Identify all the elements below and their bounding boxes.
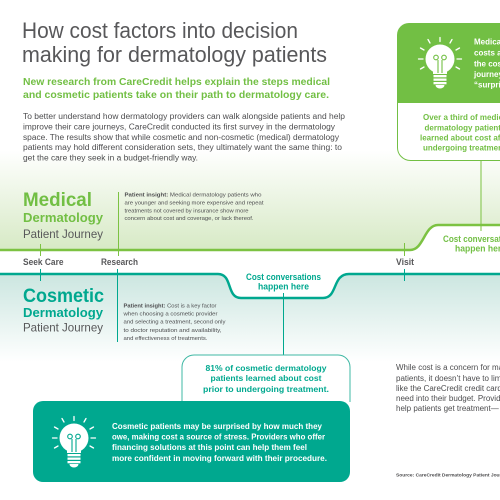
- medical heading: [23, 190, 104, 241]
- title: making for dermatology patients: [22, 42, 327, 67]
- icon: light bulb cosmetic: [52, 416, 96, 468]
- title: How cost factors into decision: [22, 18, 298, 43]
- medical patient insight: [124, 192, 264, 222]
- step labels: [23, 257, 414, 267]
- intro text: To better understand how dermatology providers can walk alongside patients and help: [23, 112, 346, 121]
- callout: cost conversations cosmetic: happen here: [258, 282, 309, 292]
- subheading: [23, 76, 330, 101]
- intro text: space. The results show that while cosmetic and non-cosmetic (medical) dermatology: [23, 133, 339, 142]
- visit tick teal: [404, 269, 405, 281]
- seek care tick green: [40, 244, 41, 256]
- subheading: and cosmetic patients take on their path to dermatology care.: [23, 89, 329, 101]
- cosmetic statistic text: [203, 363, 329, 394]
- title: [22, 18, 327, 67]
- intro text: [23, 112, 346, 162]
- cosmetic patient insight: when choosing a cosmetic provider: [122, 312, 218, 318]
- cosmetic patient insight: and effectiveness of treatments.: [124, 336, 208, 342]
- cosmetic patient insight: [122, 304, 226, 342]
- cosmetic patient insight: and selecting a treatment, second only: [124, 320, 226, 326]
- cost conversation connector teal: [283, 293, 284, 355]
- cosmetic callout text: [112, 421, 327, 463]
- medical callout text: [473, 38, 500, 90]
- seek care tick teal: [40, 269, 41, 281]
- intro text: get the care they seek in a budget-friendly way.: [23, 154, 198, 162]
- step labels: Research: [101, 257, 138, 267]
- panel: medical journey background: [0, 150, 500, 250]
- cosmetic statistic text: patients learned about cost: [210, 373, 322, 383]
- cost conversation connector green: [480, 160, 482, 231]
- intro text: patients may hold different consideration sets, they ultimately want the same thing: to: [23, 143, 343, 152]
- cosmetic callout text: Cosmetic patients may be surprised by how much they: [112, 421, 322, 431]
- closing text: [396, 363, 500, 413]
- cosmetic callout text: owe, making cost a source of stress. Providers who offer: [112, 432, 326, 442]
- medical statistic: [420, 113, 500, 152]
- cosmetic heading: Patient Journey: [23, 320, 103, 334]
- intro text: improve their care journeys, CareCredit conducted its first survey in the dermatology: [23, 122, 335, 132]
- cosmetic heading: Cosmetic: [23, 286, 104, 307]
- medical heading: Patient Journey: [23, 227, 103, 241]
- cosmetic patient insight: to doctor reputation and availability,: [124, 328, 222, 334]
- step labels: Seek Care: [23, 257, 64, 267]
- closing text: help patients get treatment—: [396, 404, 499, 413]
- medical patient insight: Patient insight: Medical dermatology patients who: [124, 192, 262, 198]
- panel: cosmetic journey background: [0, 274, 500, 362]
- cosmetic patient insight: Patient insight: Cost is a key factor: [124, 304, 217, 310]
- callout: cost conversations cosmetic: [246, 272, 321, 292]
- medical patient insight: treatments not covered by insurance show more: [124, 208, 248, 214]
- subheading: New research from CareCredit helps explain the steps medical: [23, 76, 330, 88]
- medical patient insight: are younger and seeking more expensive and repeat: [124, 200, 264, 206]
- panel: cosmetic statistic box: [182, 355, 350, 402]
- callout: cost conversations cosmetic: Cost conversations: [246, 272, 321, 282]
- panel: medical callout box: [397, 23, 500, 160]
- cosmetic statistic text: prior to undergoing treatment.: [203, 384, 329, 394]
- cosmetic heading: Dermatology: [23, 305, 104, 320]
- cosmetic statistic text: 81% of cosmetic dermatology: [206, 363, 327, 373]
- medical heading: Dermatology: [23, 210, 104, 225]
- cosmetic callout text: more confident in moving forward with their procedure.: [112, 453, 327, 463]
- research connector teal: [117, 269, 118, 342]
- panel: cosmetic callout box: [33, 401, 350, 482]
- cosmetic callout text: financing solutions at this point can help them feel: [112, 442, 307, 452]
- cosmetic journey line: [0, 274, 500, 298]
- research connector green: [118, 192, 119, 256]
- medical journey line: [0, 225, 500, 250]
- icon: light bulb medical: [418, 38, 462, 88]
- visit tick green: [404, 243, 405, 256]
- cosmetic heading: [23, 286, 104, 334]
- medical patient insight: concern about cost and coverage, or lack thereof.: [124, 216, 254, 222]
- callout: cost conversations medical: [443, 234, 500, 254]
- step labels: Visit: [396, 257, 414, 267]
- medical heading: Medical: [23, 190, 92, 211]
